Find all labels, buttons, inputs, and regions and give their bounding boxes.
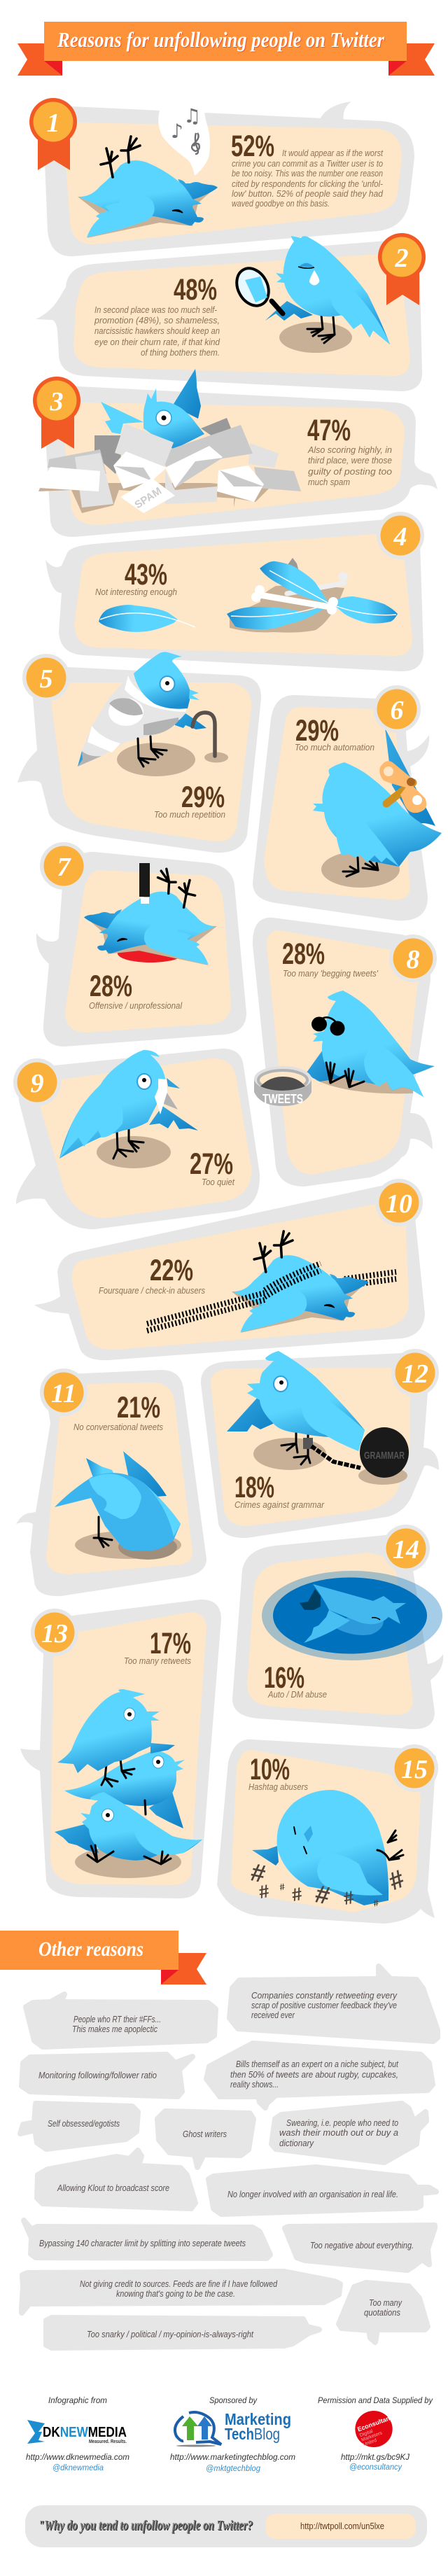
title ribbon [18,22,435,76]
bubble: companies retweeting [230,1966,438,2041]
description 5: Too much repetition [154,809,225,820]
credit: marketing tech blog: Sponsored by [209,2395,258,2405]
bubble: companies retweeting: received ever [251,2010,295,2020]
description 2: promotion (48%), so shameless, [94,315,220,326]
illustration: blind begging bird [307,990,435,1097]
title ribbon: Reasons for unfollowing people on Twitter [57,27,385,52]
heading ribbon: other reasons: Other reasons [38,1938,144,1961]
panel background 3 [45,386,438,537]
illustration: dead bird with blood and boot [84,863,217,965]
description 3: Also scoring highly, in [307,444,392,455]
bubble: RT their FFs [26,1994,216,2047]
bubble: bills themself: reality shows... [230,2079,279,2090]
credit: marketing tech blog: TechBlog [225,2425,280,2443]
illustration: upside-down round bird with hashes: # [384,1864,408,1896]
description 2: eye on their churn rate, if that kind [94,337,220,347]
bubble: follower ratio: Monitoring following/follower ratio [38,2070,157,2080]
badge 9: 9 [31,1069,43,1098]
icon: lone feather [99,605,195,632]
illustration: upside-down round bird with hashes: # [279,1881,286,1893]
panel background 6 [253,695,429,920]
bubble: follower ratio [22,2054,192,2096]
icon: music notes [171,104,201,154]
badge 10: 10 [386,1189,412,1219]
illustration: upside-down round bird with hashes: # [313,1879,332,1910]
description 2 [94,304,220,358]
poll call-to-action box [25,2505,427,2547]
panel background 9 [16,1049,260,1229]
badge 3 [33,377,80,449]
badge 10 [375,1179,423,1226]
bubble: klout: Allowing Klout to broadcast score [57,2183,169,2193]
bubble: self obsessed: Self obsessed/egotists [48,2118,120,2129]
bubble: ghost writers: Ghost writers [183,2129,227,2139]
credit: marketing tech blog [170,2395,295,2473]
stat 28% begging: 28% [282,937,325,971]
description 15: Hashtag abusers [248,1782,308,1792]
illustration: stack of three birds [55,1689,202,1878]
stat 10%: 10% [250,1753,290,1786]
bubble: swearing [272,2104,426,2162]
stat 43%: 43% [125,558,167,592]
illustration: dead bird [78,136,218,238]
badge 2 [378,233,426,305]
panel: reason 14 auto DM [232,1525,443,1729]
bubble: too many quotations: Too many [369,2297,402,2308]
badge 6: 6 [391,696,403,725]
description 8: Too many 'begging tweets' [283,968,378,979]
bubble: too snarky: Too snarky / political / my-opinion-is-always-right [87,2329,254,2339]
stat 28% offensive: 28% [90,969,132,1003]
bubble: bills themself [206,2043,433,2108]
panel background 7 [36,852,246,1046]
bubble: bills themself: Bills themself as an expert on a niche subject, but [236,2059,399,2069]
credit: econsultancy [318,2395,433,2472]
bubble: bypassing 140: Bypassing 140 character limit by splitting into seperate tweets [39,2238,246,2248]
badge 7 [40,842,88,890]
credit: econsultancy: http://mkt.gs/bc9KJ [341,2452,410,2462]
bubble: bypassing 140 [24,2220,270,2258]
panel: reason 8 begging tweets [253,918,437,1186]
bubble: too many quotations [339,2283,428,2342]
badge 13: 13 [41,1619,68,1648]
description 2: narcissistic hawkers should keep an [94,326,220,336]
badge 1 [29,98,77,170]
badge 3: 3 [49,387,63,416]
illustration: bird with head in the sand [55,1451,181,1560]
illustration: upside-down round bird with hashes: # [257,1880,271,1903]
bubble: ghost writers [158,2111,253,2167]
panel: reason 6 automation [253,685,442,920]
bubble: swearing: Swearing, i.e. people who need to [286,2118,398,2128]
credit: dknewmedia: @dknewmedia [52,2463,104,2472]
bubble: RT their FFs: This makes me apoplectic [72,2024,158,2034]
credit: dknewmedia: Measured. Results. [89,2440,127,2444]
illustration: run-over bird with tyre tracks [147,1231,396,1333]
panel background 8 [253,918,433,1186]
description 4: Not interesting enough [95,587,177,597]
description 1: waved goodbye on this basis. [232,198,330,209]
stat 29% repetition: 29% [181,780,225,814]
description 3: third place, were those [308,455,392,465]
illustration: bird chained to ball of grammar: GRAMMAR [364,1450,405,1462]
badge 15 [391,1744,438,1792]
credit: dknewmedia: http://www.dknewmedia.com [26,2452,130,2462]
bubble: too snarky [46,2318,319,2348]
description 3: guilty of posting too [308,466,392,477]
stat 22%: 22% [150,1254,193,1287]
badge 13 [31,1609,78,1656]
description 9: Too quiet [202,1177,235,1187]
description 2: In second place was too much self- [94,304,218,315]
panel: reason 9 too quiet [13,1049,260,1229]
credit: econsultancy: Digital [359,2429,374,2438]
badge 8: 8 [406,945,420,974]
badge 4 [377,512,424,559]
badge 11: 11 [51,1379,76,1408]
description 10: Foursquare / check-in abusers [99,1285,205,1296]
illustration: bird in spam pile: SPAM [132,485,164,511]
panel background 14 [232,1535,443,1729]
bubble: too many quotations: quotations [364,2307,400,2318]
icon: tweets bowl: TWEETS [262,1092,303,1106]
panel background 4 [46,518,424,671]
description 14: Auto / DM abuse [267,1689,327,1700]
panel: reason 2 self-promotion [36,233,426,391]
badge 5: 5 [39,664,53,694]
bubble: not giving credit [22,2272,340,2313]
description 12: Crimes against grammar [234,1499,325,1510]
stat 48%: 48% [174,273,217,307]
badge 2: 2 [395,244,409,273]
description 2: of thing bothers them. [141,347,220,358]
badge 12: 12 [402,1359,428,1389]
badge 15: 15 [401,1755,428,1784]
panel background 13 [20,1600,221,1898]
stat 47%: 47% [307,414,351,447]
bubble: self obsessed [20,2104,138,2149]
illustration: upside-down round bird with hashes: # [372,1897,380,1909]
bubble: too negative [285,2225,435,2270]
panel background 1 [43,102,414,256]
credit: marketing tech blog: http://www.marketingtechblog.com [170,2452,295,2462]
illustration: feathers and bones [227,558,398,633]
panel background 11 [16,1370,206,1596]
bubble: swearing: wash their mouth out or buy a [279,2127,398,2138]
illustration: old bird with beard [59,1050,198,1168]
panel: reason 1 too noisy [29,98,414,256]
description 1: be too noisy. This was the number one reason [232,168,383,178]
illustration: upside-down round bird with hashes: # [342,1886,356,1909]
stat 16%: 16% [264,1661,304,1695]
panel: reason 10 foursquare [34,1179,425,1360]
panel background 10 [34,1185,425,1360]
stat 29% automation: 29% [295,714,339,748]
badge 6 [373,685,421,733]
credit: dknewmedia: DKNEWMEDIA [43,2425,127,2440]
badge 7: 7 [57,853,71,882]
panel: reason 11 no conversation [16,1368,206,1596]
illustration: wind-up bird [313,728,442,888]
description 1: low' button. 52% of people said they had [232,188,384,199]
illustration: upside-down round bird with hashes [248,1790,408,1910]
stat 21%: 21% [117,1391,160,1424]
description 1: crime you can commit as a Twitter user is to [232,158,383,169]
credit: econsultancy: Econsultancy [356,2412,398,2433]
bubble: companies retweeting: Companies constantly retweeting every [251,1990,398,2001]
illustration: crying bird with mirror [230,236,390,353]
panel background 15 [217,1740,436,1924]
badge 4: 4 [393,522,407,552]
credit: marketing tech blog: @mktgtechblog [206,2463,260,2473]
bubble: RT their FFs: People who RT their #FFs... [74,2014,161,2024]
illustration: upside-down round bird with hashes: # [248,1857,268,1889]
panel: reason 5 repetition [18,652,261,853]
stat 18%: 18% [234,1471,274,1504]
bubble: no longer involved [209,2167,436,2214]
icon: music notes: ♫ [183,104,201,127]
bubble: bills themself: then 50% of tweets are about rugby, cupcakes, [230,2069,398,2080]
panel background 2 [36,239,422,391]
badge 5 [22,654,70,701]
bubble: swearing: dictionary [279,2138,314,2148]
bubble: too negative: Too negative about everything. [310,2240,414,2250]
panel: reason 4 not interesting [46,512,424,671]
panel background 5 [18,667,261,853]
description 13: Too many retweets [124,1656,191,1666]
heading ribbon: other reasons [0,1931,206,1984]
credit: dknewmedia: Infographic from [48,2395,107,2405]
credit: econsultancy: Marketers [360,2430,383,2443]
stat 52%: 52% [231,130,274,163]
illustration: bird in spam pile [38,369,301,513]
panel: reason 3 spam [33,369,438,537]
description 3: much spam [308,477,350,487]
bubble: companies retweeting: scrap of positive customer feedback they've [251,2000,397,2010]
bubble: not giving credit: knowing that's going to be the case. [116,2288,235,2299]
credit: econsultancy: Permission and Data Supplied by [318,2395,433,2405]
description 11: No conversational tweets [74,1422,163,1432]
illustration: bird floating in pool [262,1571,442,1660]
illustration: upside-down round bird with hashes: # [290,1883,304,1905]
poll call-to-action box: http://twtpoll.com/un5lxe [300,2521,384,2531]
badge 9 [13,1058,61,1106]
badge 8 [389,934,437,982]
illustration: bird chained to ball of grammar [227,1351,409,1485]
panel: reason 7 offensive [36,842,246,1046]
stat 27%: 27% [190,1147,233,1181]
description 1: cited by respondents for clicking the 'unfol- [232,178,384,189]
credit: econsultancy: United [363,2438,377,2447]
icon: tweets bowl [254,1066,312,1106]
badge 11 [40,1368,88,1416]
credit: marketing tech blog: Marketing [225,2410,291,2428]
bubble: not giving credit: Not giving credit to sources. Feeds are fine if I have followed [80,2278,278,2289]
panel: reason 12 grammar [201,1349,439,1538]
badge 1: 1 [46,108,60,138]
credit: dknewmedia [26,2395,130,2472]
stat 17%: 17% [150,1627,191,1660]
illustration: bandaged old bird with cane [78,652,228,776]
panel: reason 15 hashtags [217,1740,438,1924]
badge 12 [391,1349,439,1396]
badge 14 [382,1525,430,1572]
panel background 12 [201,1353,439,1538]
bubble: klout [37,2150,195,2208]
credit: econsultancy: @econsultancy [349,2462,402,2472]
icon: music notes: ♪ [171,120,183,143]
description 7: Offensive / unprofessional [89,1000,183,1011]
bubble: no longer involved: No longer involved with an organisation in real life. [227,2189,398,2199]
badge 14: 14 [393,1535,419,1564]
description 3 [307,444,392,487]
description 1 [232,148,384,209]
description 6: Too much automation [295,742,374,752]
description 1: It would appear as if the worst [282,148,384,158]
panel: reason 13 retweets [20,1600,221,1898]
poll call-to-action box: "Why do you tend to unfollow people on Twitter? [38,2518,253,2533]
